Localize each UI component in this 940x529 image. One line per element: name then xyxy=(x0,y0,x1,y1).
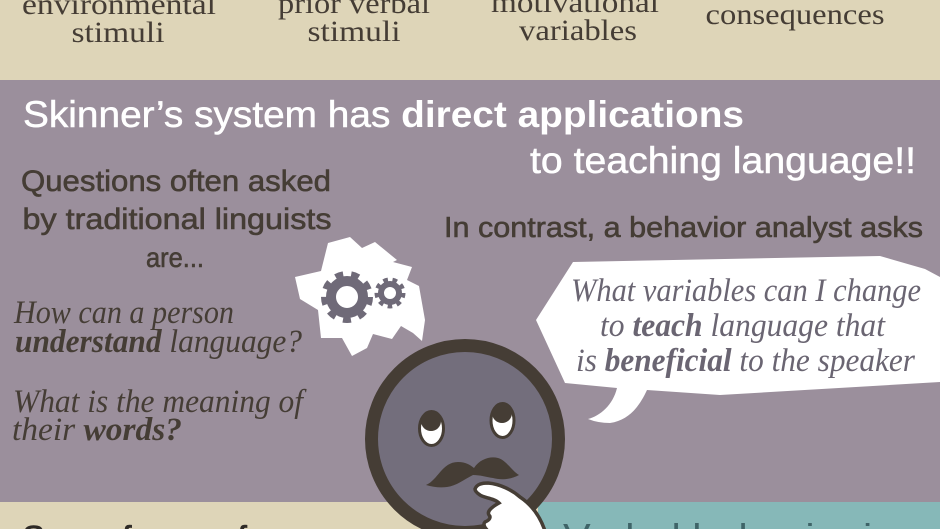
left question heading: by traditional linguists xyxy=(22,203,332,236)
left question heading xyxy=(21,165,332,273)
top band labels: stimuli xyxy=(308,15,400,48)
traditional questions xyxy=(12,295,307,448)
left question heading: are... xyxy=(146,242,204,273)
speech bubble text: What variables can I change xyxy=(571,273,921,309)
main purple panel xyxy=(0,80,940,503)
bottom left band xyxy=(0,502,540,529)
right eye xyxy=(491,403,514,438)
top band labels xyxy=(22,0,884,49)
hand xyxy=(475,483,545,529)
right contrast heading: In contrast, a behavior analyst asks xyxy=(444,212,923,244)
bottom right teal band xyxy=(538,502,940,529)
icon: large gear xyxy=(324,274,370,320)
top band labels: stimuli xyxy=(72,16,164,49)
top band labels: variables xyxy=(519,14,637,47)
left eye xyxy=(420,411,444,446)
speech bubble xyxy=(536,256,940,423)
speech bubble text: to teach language that xyxy=(600,308,886,344)
traditional questions: What is the meaning of xyxy=(13,384,307,420)
headline: to teaching language!! xyxy=(530,140,916,181)
traditional questions: How can a person xyxy=(13,295,234,331)
traditional questions: understand language? xyxy=(15,324,302,360)
traditional questions: their words? xyxy=(12,412,182,448)
moustache xyxy=(426,457,519,487)
headline: Skinner’s system has direct applications xyxy=(23,94,744,135)
left question heading: Questions often asked xyxy=(21,165,331,198)
thought bubble with gears xyxy=(295,237,425,356)
icon: small gear xyxy=(376,280,404,306)
thinking face xyxy=(372,346,558,529)
headline xyxy=(23,94,916,181)
speech bubble text xyxy=(571,273,921,379)
face circle xyxy=(372,346,558,529)
speech bubble text: is beneficial to the speaker xyxy=(576,343,915,379)
top band xyxy=(0,0,940,80)
